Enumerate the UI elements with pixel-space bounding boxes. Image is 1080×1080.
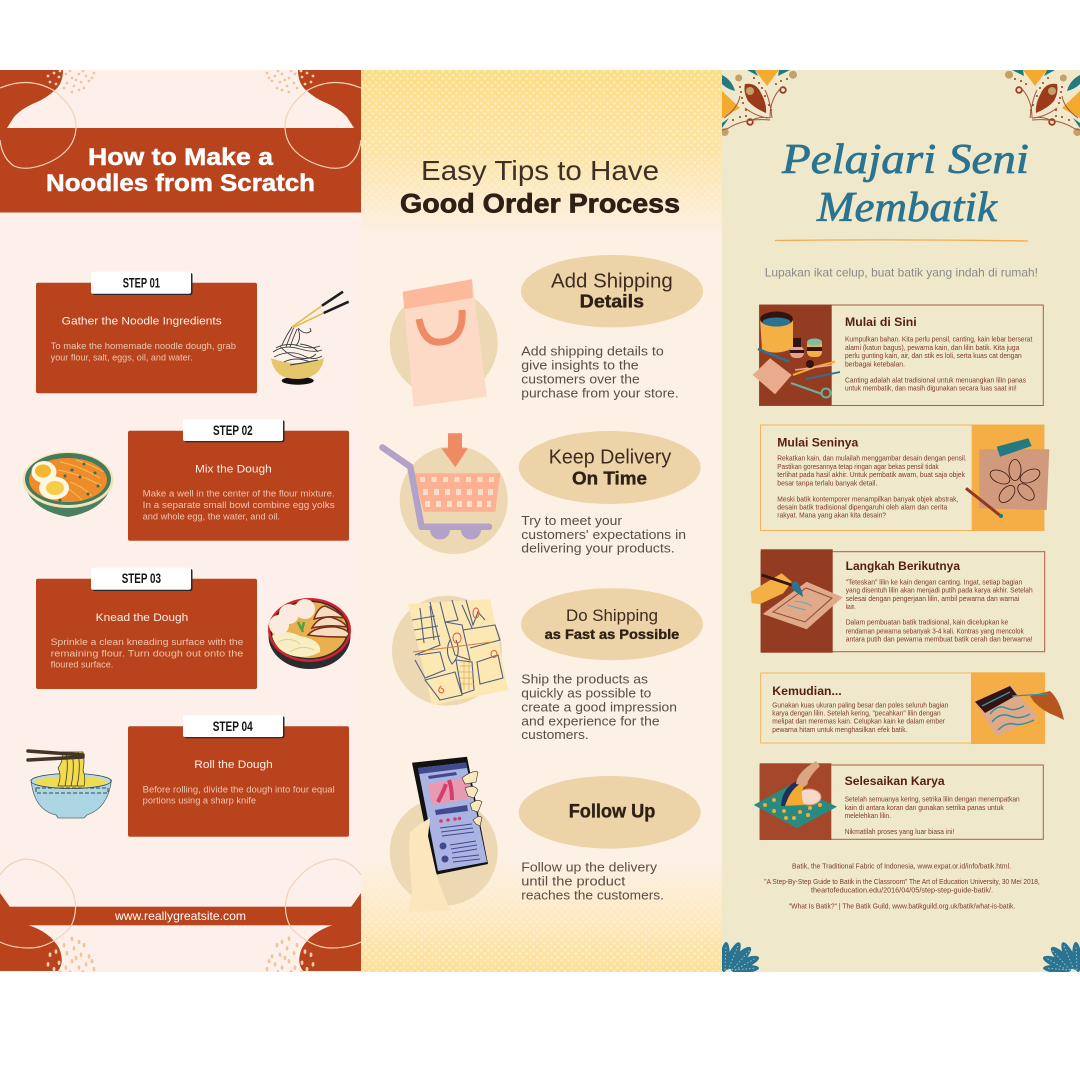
card: Langkah Berikutnya: kain. [846, 602, 856, 611]
tip 1 heading: Add Shipping [551, 270, 673, 292]
halftone bottom [361, 860, 722, 972]
tip 3 text: and experience for the [521, 713, 660, 728]
illustration: painting [975, 685, 1064, 737]
step 2 card [128, 419, 349, 541]
card: Mulai Seninya: desain batik tradisional dipengaruhi oleh alam dan cerita [777, 503, 948, 512]
card: Mulai Seninya: Pastikan goresannya tetap ringan agar bekas pensil tidak [777, 462, 939, 471]
step 4 card: STEP 04 [213, 719, 253, 734]
tip 4 heading: Follow Up [569, 802, 655, 822]
tip 3 text: create a good impression [521, 699, 677, 714]
card: Mulai di Sini: alami (katun bagus), pewarna kain, dan lilin batik. Kita juga [845, 343, 1020, 352]
footer band [0, 907, 361, 925]
illustration: wax on cloth [751, 573, 843, 629]
tip 3 heading: Do Shipping [566, 606, 658, 625]
card: Mulai Seninya: Rekatkan kain, dan mulailah menggambar desain dengan pensil. [777, 454, 967, 463]
ornament: leaves [722, 942, 1080, 972]
title: Good Order Process [400, 188, 680, 218]
illustration: tools [753, 312, 840, 398]
card: Mulai Seninya: Mulai Seninya [777, 438, 859, 450]
card: Langkah Berikutnya: selesai dengan pengerjaan lilin, ambil pewarna dan warnai [846, 594, 1020, 603]
icon: map [392, 596, 508, 706]
panel: noodles [0, 70, 361, 975]
step 1 card: STEP 01 [123, 276, 160, 290]
title: Membatik [816, 185, 998, 231]
icon: noodles with chopsticks [271, 292, 349, 385]
step 1 card: your flour, salt, eggs, oil, and water. [51, 352, 193, 362]
card: Mulai di Sini: Kumpulkan bahan. Kita perlu pensil, canting, kain lebar berserat [845, 334, 1032, 343]
tip 4 text: reaches the customers. [521, 887, 664, 902]
tip 2 text [521, 513, 686, 556]
panel: order tips [361, 70, 722, 972]
card: Langkah Berikutnya [751, 549, 1045, 653]
card: Mulai Seninya: rakyat. Mana yang akan kita desain? [777, 511, 886, 520]
tip 3 text: quickly as possible to [521, 685, 651, 700]
tip 4 heading [519, 776, 701, 849]
header decoration [0, 70, 361, 128]
tip 1 text [521, 344, 679, 401]
card: Langkah Berikutnya: antara putih dan pewarna membuat batik cerah dan berwarna! [846, 634, 1033, 643]
title: Noodles from Scratch [46, 170, 315, 197]
card: Kemudian: Kemudian... [772, 686, 842, 698]
step 1 card: To make the homemade noodle dough, grab [51, 341, 236, 351]
header band [0, 128, 361, 212]
step 3 card [36, 568, 257, 689]
step 3 card: STEP 03 [122, 571, 161, 586]
tip 1 text: give insights to the [521, 358, 639, 373]
tip 2 heading: Keep Delivery [549, 446, 671, 468]
card: Kemudian [761, 672, 1064, 744]
step 3 card: Knead the Dough [96, 612, 188, 624]
card: Langkah Berikutnya: Dalam pembuatan batik tradisional, kain dicelupkan ke [846, 618, 1008, 627]
title [400, 155, 680, 218]
card: Langkah Berikutnya: rendaman pewarna sebanyak 3-4 kali. Kontras yang mencolok [846, 626, 1024, 635]
card: Mulai di Sini: Mulai di Sini [845, 317, 917, 329]
icon: shopping bag [390, 279, 498, 407]
title: How to Make a [88, 144, 274, 171]
step 2 card: and whole egg, the water, and oil. [143, 511, 280, 521]
card: Selesaikan Karya: kain di antara koran dan gunakan setrika panas untuk [845, 803, 1004, 812]
title: Pelajari Seni [781, 137, 1029, 183]
references: "A Step-By-Step Guide to Batik in the Classroom" The Art of Education University, 30 Mei 2018, [764, 877, 1040, 886]
step 4 card [128, 715, 349, 837]
card: Mulai di Sini: untuk membatik, dan masih digunakan secara luas saat ini! [845, 384, 1017, 393]
card: Langkah Berikutnya: Langkah Berikutnya [846, 561, 961, 573]
tip 3 heading [521, 588, 703, 660]
card: Mulai di Sini: berbagai ketebalan. [845, 359, 905, 368]
card: Selesaikan Karya: Setelah semuanya kering, setrika lilin dengan menempatkan [845, 795, 1020, 804]
tip 3 text: Ship the products as [521, 671, 649, 686]
illustration: sketch [966, 438, 1049, 518]
ornament: corners [721, 70, 1080, 136]
card: Mulai Seninya: terlihat pada hasil akhir. Untuk pembatik awam, buat saja objek [777, 470, 965, 479]
tip 1 text: purchase from your store. [521, 386, 679, 401]
icon: bowl with eggs [22, 452, 114, 517]
card: Mulai di Sini: perlu gunting kain, air, dan stik es loli, serta kuas cat dengan [845, 351, 1022, 360]
tip 3 heading: as Fast as Possible [545, 626, 680, 642]
title [781, 137, 1029, 231]
step 3 card: floured surface. [51, 660, 113, 670]
card: Mulai di Sini [753, 305, 1043, 406]
icon: bowl with meat [268, 598, 351, 669]
card: Langkah Berikutnya: "Teteskan" lilin ke kain dengan canting. Ingat, setiap bagian [846, 578, 1022, 587]
references [764, 861, 1040, 911]
references: Batik, the Traditional Fabric of Indonesia, www.expat.or.id/info/batik.html. [792, 861, 1011, 870]
card: Kemudian: pewarna hitam untuk menghasilkan efek batik. [772, 725, 907, 734]
tip 3 text: customers. [521, 727, 589, 742]
card: Kemudian: Gunakan kuas ukuran paling besar dan poles seluruh bagian [772, 700, 948, 709]
step 4 card: Roll the Dough [194, 759, 273, 771]
step 3 card: Sprinkle a clean kneading surface with the [51, 637, 243, 647]
card: Selesaikan Karya: melelehkan lilin. [845, 811, 891, 820]
tip 4 text [521, 860, 664, 902]
tip 2 text: Try to meet your [521, 513, 623, 528]
step 1 card [36, 272, 257, 393]
card: Kemudian: melipat dan meremas kain. Celupkan kain ke dalam ember [772, 717, 946, 726]
card: Selesaikan Karya: Selesaikan Karya [845, 776, 945, 788]
title: Easy Tips to Have [421, 155, 659, 186]
step 1 card: Gather the Noodle Ingredients [62, 316, 222, 328]
card: Mulai Seninya: Meski batik kontemporer menampilkan banyak objek abstrak, [777, 494, 958, 503]
tip 1 heading: Details [580, 292, 644, 312]
tip 2 heading: On Time [572, 468, 647, 488]
card: Kemudian: karya dengan lilin. Setelah kering, "pecahkan" lilin dengan [772, 709, 941, 718]
title underline [775, 240, 1028, 241]
icon: phone in hand [390, 757, 498, 912]
references: theartofeducation.edu/2016/04/05/step-step-guide-batik/. [811, 886, 993, 895]
references: "What Is Batik?" | The Batik Guild, www.batikguild.org.uk/batik/what-is-batik. [789, 902, 1015, 911]
step 4 card: Before rolling, divide the dough into four equal [143, 784, 335, 794]
tip 1 text: customers over the [521, 372, 640, 386]
footer decoration [0, 893, 361, 975]
card: Selesaikan Karya: Nikmatilah proses yang luar biasa ini! [845, 827, 954, 836]
tip 4 text: Follow up the delivery [521, 860, 658, 875]
card: Mulai Seninya [760, 425, 1049, 531]
step 3 card: remaining flour. Turn dough out onto the [51, 648, 243, 658]
icon: bowl with lifted noodles [28, 751, 112, 818]
step 2 card: STEP 02 [213, 423, 253, 438]
panel: batik [719, 70, 1080, 974]
tip 1 text: Add shipping details to [521, 344, 664, 359]
subtitle: Lupakan ikat celup, buat batik yang indah di rumah! [765, 266, 1038, 280]
tip 1 heading [521, 255, 703, 327]
tip 2 heading [519, 431, 701, 504]
tip 2 text: customers' expectations in [521, 527, 686, 542]
tip 2 text: delivering your products. [521, 541, 675, 556]
illustration: ironing [754, 761, 837, 828]
step 2 card: In a separate small bowl combine egg yolks [143, 500, 335, 510]
icon: cart [382, 433, 508, 554]
tip 4 text: until the product [521, 873, 626, 888]
website: www.reallygreatsite.com [114, 909, 246, 923]
footer outlines [0, 859, 361, 948]
step 4 card: portions using a sharp knife [143, 796, 256, 806]
halftone top [361, 70, 722, 235]
header outlines [0, 82, 361, 168]
step 2 card: Mix the Dough [195, 464, 272, 476]
card: Selesaikan Karya [754, 761, 1043, 840]
step 2 card: Make a well in the center of the flour mixture. [143, 489, 335, 499]
card: Langkah Berikutnya: yang disentuh lilin akan menjadi putih pada karya akhir. Setelah [846, 586, 1033, 595]
title [46, 144, 315, 197]
tip 3 text [521, 671, 677, 742]
card: Mulai Seninya: besar tanpa terlalu banyak detail. [777, 478, 877, 487]
card: Mulai di Sini: Canting adalah alat tradisional untuk menuangkan lilin panas [845, 376, 1026, 385]
